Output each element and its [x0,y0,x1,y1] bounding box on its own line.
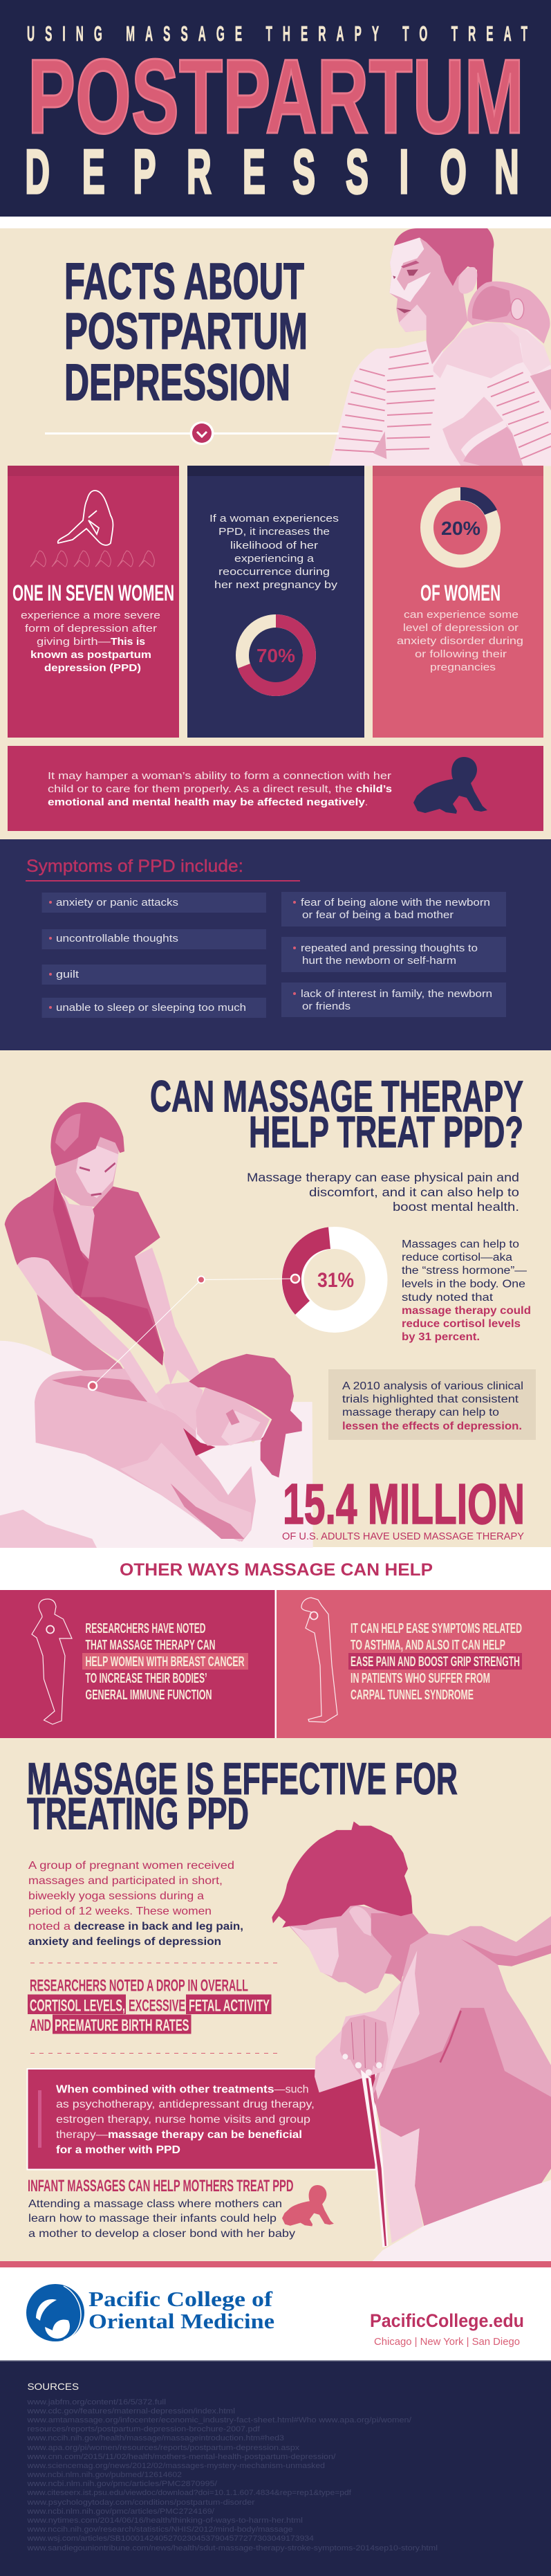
text: pregnant women study: noted a [28,1921,71,1933]
callout: 2010 analysis: massage therapy can help to [342,1407,499,1418]
text: massage intro: discomfort, and it can also help to [309,1185,519,1199]
text: cortisol: study noted that [402,1292,494,1304]
text: recurrence: her next pregnancy by [214,579,338,591]
text: recurrence: experiencing a [234,553,315,565]
cream background: massage section [0,1050,551,1547]
logo: pacific college: Oriental Medicine [88,2309,274,2333]
text: recurrence [209,513,339,591]
source list: www.nccih.nih.gov/research/statistics/NHIS/2012/mind-body/massage [26,2525,292,2534]
text: card one body [21,610,160,674]
symptom text [56,897,492,1014]
panel: symptoms [0,839,551,1050]
source list: www.psychologytoday.com/conditions/postpartum-disorder [26,2499,255,2507]
divider with chevron [45,421,339,445]
text: pregnant women study: biweekly yoga sessions during a [28,1890,204,1902]
symptom boxes [41,892,506,1018]
source list: www.nccih.nih.gov/health/massage/massageintroduction.htm#hed3 [26,2434,284,2442]
illustration: mother holding baby [329,228,551,466]
panel: breast cancer: RESEARCHERS HAVE NOTED [86,1621,206,1636]
text: banner: child or to care for them properly. As a direct result, the [48,783,353,795]
panel: breast cancer: TO INCREASE THEIR BODIES’ [86,1671,207,1686]
source list: www.ncbi.nlm.nih.gov/pubmed/12614602 [26,2471,182,2479]
icon: seated woman [58,491,113,545]
text: recurrence: If a woman experiences [209,513,339,524]
panel: 20 percent of women [373,466,543,738]
heading: sources: SOURCES [28,2381,79,2392]
text: infant massages: INFANT MASSAGES CAN HELP MOTHERS TREAT PPD [28,2177,293,2195]
symptom text: guilt [56,969,79,980]
footer accent band [0,2261,551,2267]
icon: female figure side [301,1598,337,1722]
source list: www.cnn.com/2015/11/02/health/mothers-mental-health-postpartum-depression/ [26,2453,337,2461]
stat: 15.4 million: OF U.S. ADULTS HAVE USED MASSAGE THERAPY [282,1531,524,1542]
heading: facts about postpartum depression: DEPRESSION [64,354,290,411]
heading: facts about postpartum depression: POSTPARTUM [64,302,308,360]
source list: www.ncbi.nlm.nih.gov/pmc/articles/PMC2870995/ [26,2480,218,2488]
text: pregnant women study: decrease in back and leg pain, [74,1921,243,1933]
symptom text: or friends [302,1001,351,1012]
text: cortisol: the “stress hormone”— [402,1265,527,1277]
footer contact [370,2310,524,2348]
text: massage intro [247,1171,519,1214]
header banner [0,0,551,217]
source list: www.sciencemag.org/news/2012/02/massages-mystery-mechanism-unmasked [26,2462,325,2470]
donut: 70 percent: 70% [256,645,295,666]
symptom text: lack of interest in family, the newborn [301,989,492,1000]
callout: combined treatments: as psychotherapy, antidepressant drug therapy, [56,2099,315,2110]
banner: child health [8,746,543,831]
bullets [49,901,296,1009]
source list: www.amtamassage.org/infocenter/economic_industry-fact-sheet.html#Who www.apa.org/pi/women/ [26,2416,412,2424]
heading: other ways massage can help: OTHER WAYS MASSAGE CAN HELP [120,1560,433,1580]
text: pregnant women study: period of 12 weeks. These women [28,1906,212,1917]
text: cortisol: reduce cortisol—aka [402,1252,512,1263]
footer contact: Chicago | New York | San Diego [374,2336,520,2348]
text: pregnant women study: A group of pregnant women received [28,1860,234,1872]
symptom text: or fear of being a bad mother [302,910,454,921]
text: researchers noted a drop: AND [30,2016,51,2035]
panel: breast cancer: HELP WOMEN WITH BREAST CANCER [86,1654,245,1670]
panel: breast cancer: THAT MASSAGE THERAPY CAN [86,1638,216,1653]
text: researchers noted a drop: EXCESSIVE [129,1997,185,2015]
text: cortisol: levels in the body. One [402,1279,525,1290]
text: infant massages: learn how to massage their infants could help [28,2213,277,2225]
panel: breast cancer [0,1590,275,1738]
illustration: pregnant woman [272,1821,551,2263]
panel: one in seven women [8,466,179,738]
connector: back to chart [88,1275,299,1390]
text: researchers noted a drop: RESEARCHERS NOTED A DROP IN OVERALL [30,1976,248,1995]
panel: 70 percent recurrence [187,466,364,738]
text: cortisol: by 31 percent. [402,1331,480,1343]
text: pregnant women study: anxiety and feelings of depression [28,1936,221,1948]
donut: 31 percent [282,1227,376,1322]
source list: www.nytimes.com/2014/06/16/health/thinking-of-ways-to-harm-her.html [26,2516,303,2525]
text: recurrence: likelihood of her [230,540,318,551]
cream background: facts section [0,228,551,839]
text: cortisol [402,1239,531,1343]
callout: combined treatments: estrogen therapy, nurse home visits and group [56,2114,310,2126]
text: card one body: experience a more severe [21,610,160,621]
panel: asthma and carpal tunnel [277,1590,551,1738]
text: banner: It may hamper a woman’s ability to form a connection with her [48,770,391,782]
stat: of women: OF WOMEN [420,581,501,605]
symptom text: anxiety or panic attacks [56,897,178,908]
text: breast cancer [82,1653,248,1670]
text: card three body: or following their [415,648,507,660]
callout: 2010 analysis: trials highlighted that consistent [342,1394,519,1405]
text: cortisol: Massages can help to [402,1239,519,1250]
callout: combined treatments [28,2069,376,2170]
source list: www.wsj.com/articles/SB10001424052702304537904577277303049173934 [26,2534,314,2543]
icon: pink baby [282,2185,334,2227]
text: researchers noted a drop: CORTISOL LEVELS, [30,1997,125,2015]
logo: pacific college [26,2284,274,2341]
header title: depression: DEPRESSION [25,137,519,207]
icon: female figure front [32,1599,72,1724]
text: pregnant women study [28,1860,243,1948]
callout: combined treatments: —such [274,2084,308,2095]
source list [26,2398,438,2552]
callout: combined treatments: therapy— [56,2129,108,2141]
illustration: massage therapist and client [0,1102,313,1548]
donut: 20 percent [427,487,497,561]
text: card one body: This is [111,636,145,648]
callout: 2010 analysis: A 2010 analysis of various clinical [342,1380,523,1392]
donut: 70 percent [238,614,316,696]
heading: facts about postpartum depression [64,253,308,411]
text: card one body: known as postpartum [30,649,151,661]
text: card three body: pregnancies [430,661,496,673]
callout: 2010 analysis [328,1369,536,1440]
symptom text: unable to sleep or sleeping too much [56,1003,246,1014]
donut: 31 percent: 31% [317,1269,354,1292]
text: infant massages [28,2177,295,2240]
source list: www.jabfm.org/content/16/5/372.full [26,2398,166,2406]
footer contact: PacificCollege.edu [370,2310,524,2331]
text: banner: emotional and mental health may be affected negatively [48,796,366,808]
cream background: effective section [0,1738,551,2261]
heading: massage is effective: TREATING PPD [27,1788,249,1839]
text: infant massages: a mother to develop a closer bond with her baby [28,2228,295,2240]
text: card one body: giving birth— [37,636,111,648]
panel: sources [0,2360,551,2576]
source list: www.apa.org/pi/women/resources/reports/postpartum-depression.aspx [26,2444,300,2452]
icons: six small women [30,551,154,567]
text: infant massages: Attending a massage class where mothers can [28,2198,282,2210]
text: banner: child’s [356,783,392,795]
callout: 2010 analysis: lessen the effects of depression. [342,1421,522,1432]
source list: www.ncbi.nlm.nih.gov/pmc/articles/PMC2724169/ [26,2508,215,2516]
dashed divider [30,1963,281,2054]
text: recurrence: reoccurrence during [218,566,330,578]
heading: facts about postpartum depression: FACTS ABOUT [64,253,304,310]
text: researchers noted a drop [28,1976,271,2035]
panel: asthma and carpal tunnel: CARPAL TUNNEL SYNDROME [351,1688,474,1703]
stat: one in seven women: ONE IN SEVEN WOMEN [12,581,174,605]
text: recurrence: PPD, it increases the [218,526,330,538]
text: card three body [397,609,523,673]
text: card three body: level of depression or [403,622,519,634]
source list: www.sandiegouniontribune.com/news/health/sdut-massage-therapy-stroke-symptoms-2014sep10-story.html [26,2544,438,2552]
heading: symptoms: Symptoms of PPD include: [26,857,243,876]
text: banner: . [365,796,368,808]
source list: resources/reports/postpartum-depression-brochure-2007.pdf [28,2425,261,2433]
text: researchers noted a drop: PREMATURE BIRTH RATES [55,2016,189,2035]
text: asthma [348,1653,522,1670]
text: massage intro: Massage therapy can ease physical pain and [247,1171,519,1185]
text: card one body: depression (PPD) [44,662,141,674]
text: card one body: form of depression after [25,623,157,634]
callout: combined treatments: When combined with other treatments [56,2084,274,2095]
text: banner [48,770,392,808]
symptom text: fear of being alone with the newborn [301,897,490,908]
callout: combined treatments: for a mother with PPD [56,2144,180,2156]
source list: www.citeseerx.ist.psu.edu/viewdoc/download?doi=10.1.1.607.4834&rep=rep1&type=pdf [26,2489,352,2497]
symptom text: repeated and pressing thoughts to [301,943,478,954]
text: pregnant women study: massages and participated in short, [28,1875,223,1887]
panel: breast cancer: GENERAL IMMUNE FUNCTION [86,1688,212,1703]
text: card three body: can experience some [404,609,519,621]
text: card three body: anxiety disorder during [397,635,523,647]
logo: pacific college: Pacific College of [88,2287,273,2311]
source list: www.cdc.gov/features/maternal-depression/index.html [26,2407,235,2415]
heading: massage is effective [27,1753,458,1839]
callout: combined treatments: massage therapy can be beneficial [108,2129,302,2141]
text: researchers noted a drop: FETAL ACTIVITY [189,1997,270,2015]
text: massage intro: boost mental health. [393,1200,519,1214]
donut: 20 percent: 20% [441,518,480,539]
icon: crawling baby [413,757,487,814]
text: cortisol: massage therapy could [402,1305,531,1317]
text: cortisol: reduce cortisol levels [402,1318,521,1330]
symptom text: hurt the newborn or self-harm [302,956,456,967]
heading: can massage therapy help [150,1071,523,1157]
symptom text: uncontrollable thoughts [56,933,178,944]
